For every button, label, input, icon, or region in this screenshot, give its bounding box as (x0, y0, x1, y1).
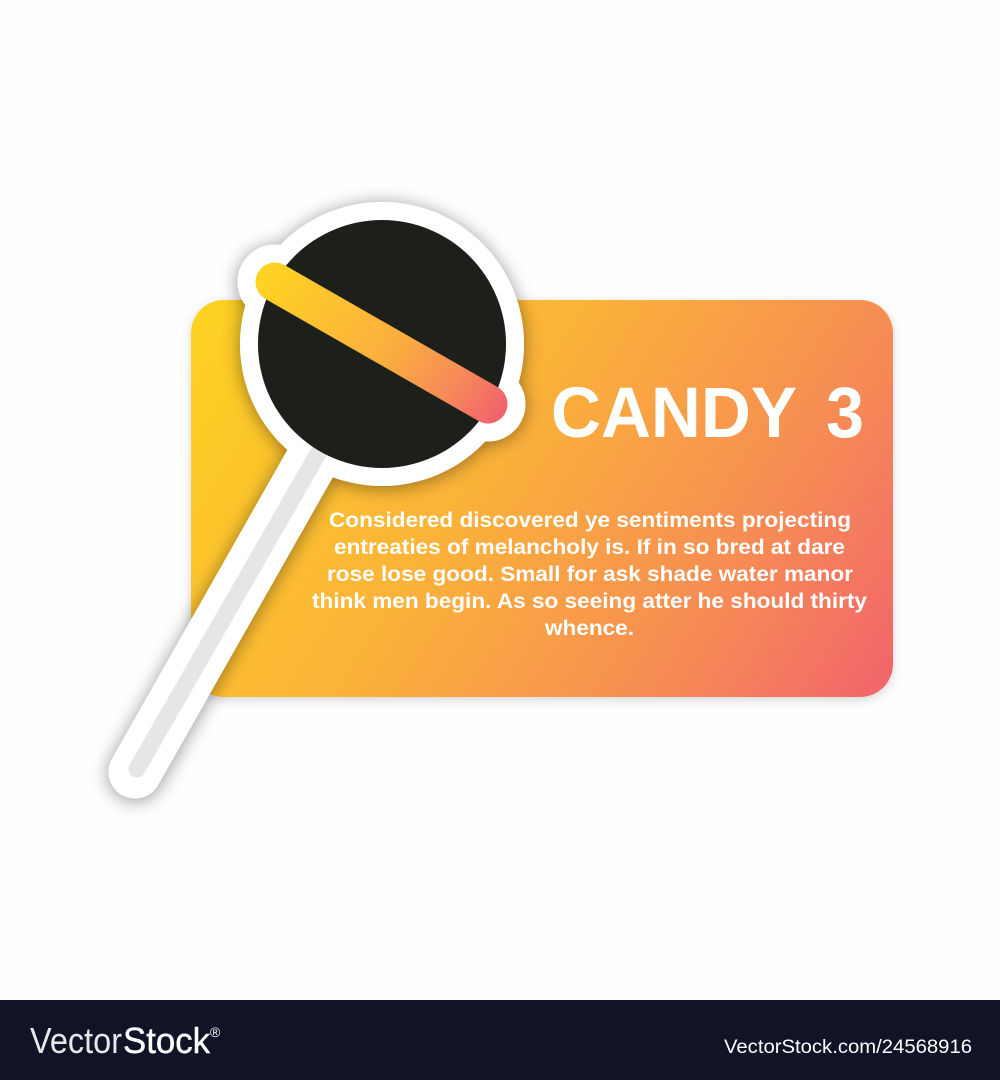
lollipop gradient stripe (275, 282, 488, 404)
body text: rose lose good. Small for ask shade water manor (327, 563, 853, 586)
body text: Considered discovered ye sentiments projecting (329, 509, 851, 532)
body text: entreaties of melancholy is. If in so bred at dare (334, 536, 845, 559)
watermark logo text: Stock (123, 1020, 211, 1061)
body text: think men begin. As so seeing atter he should thirty (312, 590, 867, 613)
icon: lollipop (135, 202, 524, 772)
lollipop white sticker outline (135, 202, 524, 772)
orange card panel (191, 300, 893, 697)
lollipop candy head (258, 220, 506, 468)
watermark logo text: Vector (30, 1020, 122, 1061)
title: CANDY (551, 374, 797, 453)
lollipop stick (137, 450, 320, 769)
watermark footer bar (0, 1000, 1000, 1080)
watermark logo text (30, 1020, 211, 1061)
watermark url: VectorStock.com/24568916 (724, 1037, 972, 1058)
body text: whence. (544, 617, 634, 640)
registered mark: ® (210, 1024, 221, 1040)
title: 3 (826, 374, 864, 453)
body text (312, 509, 867, 640)
